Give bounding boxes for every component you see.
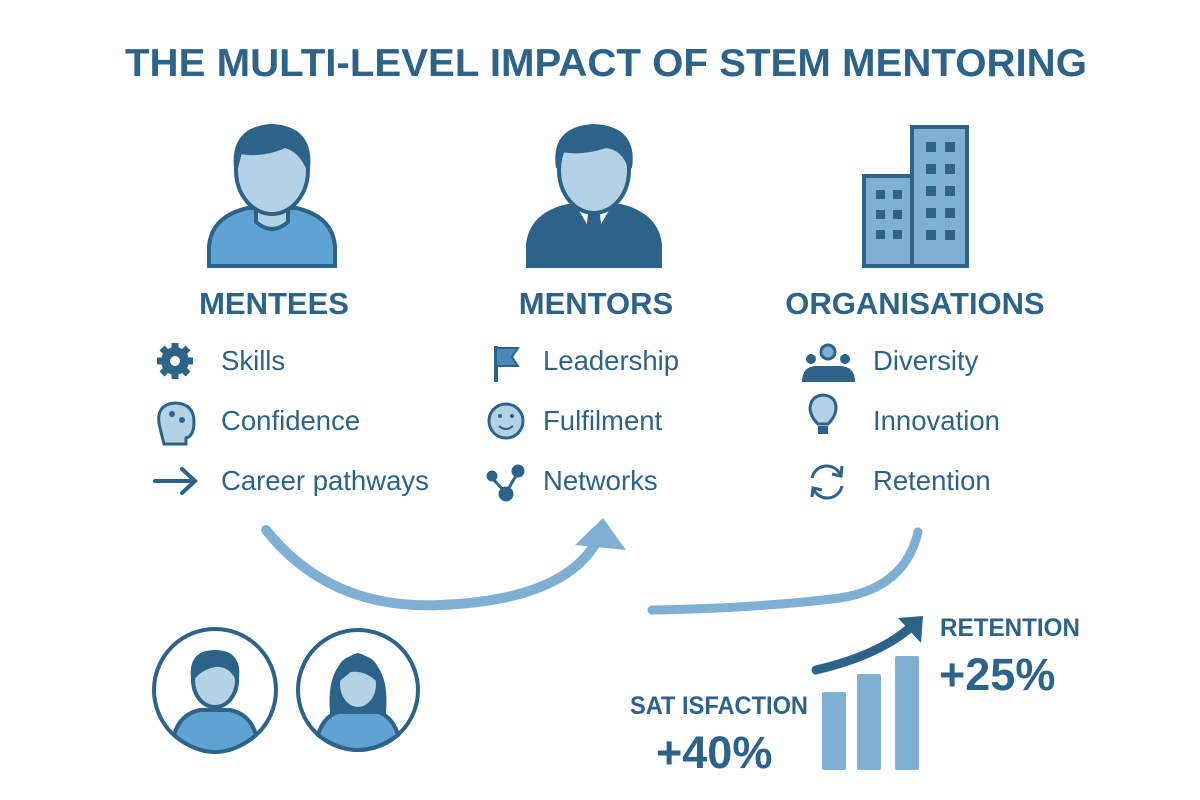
arrow: curved mentees to mentors bbox=[266, 518, 626, 605]
icon: arrow right bbox=[155, 469, 195, 493]
list: mentors bbox=[488, 345, 679, 500]
list: organisations: Retention bbox=[873, 465, 991, 496]
icon: bulb bbox=[810, 395, 836, 434]
icon: mentee person bbox=[209, 126, 335, 266]
icon: smiley bbox=[489, 404, 523, 438]
icon: network bbox=[488, 466, 523, 500]
heading: organisations: ORGANISATIONS bbox=[785, 286, 1045, 321]
avatar: male bbox=[154, 629, 276, 752]
icon: group bbox=[802, 345, 855, 382]
icon: building bbox=[864, 127, 967, 266]
list: mentees: Confidence bbox=[221, 405, 360, 436]
list: mentees bbox=[155, 343, 429, 496]
bar chart bbox=[822, 656, 919, 770]
stat: satisfaction: +40% bbox=[656, 727, 772, 778]
title: THE MULTI-LEVEL IMPACT OF STEM MENTORING bbox=[125, 42, 1087, 85]
list: mentors: Fulfilment bbox=[543, 405, 663, 436]
stat: satisfaction bbox=[630, 692, 808, 778]
list: organisations: Diversity bbox=[873, 345, 979, 376]
icon: flag bbox=[496, 346, 518, 382]
arrow: curved to organisations bbox=[652, 532, 918, 610]
icon: refresh bbox=[812, 466, 842, 498]
list: mentees: Career pathways bbox=[221, 465, 429, 496]
stat: satisfaction: SAT ISFACTION bbox=[630, 692, 808, 720]
list: mentees: Skills bbox=[221, 345, 285, 376]
stat: retention: +25% bbox=[939, 649, 1055, 700]
stat: retention: RETENTION bbox=[940, 614, 1080, 642]
icon: head bbox=[159, 403, 194, 444]
stat: retention bbox=[939, 614, 1080, 700]
heading: mentors: MENTORS bbox=[519, 286, 673, 321]
list: mentors: Networks bbox=[543, 465, 658, 496]
list: organisations bbox=[802, 345, 1000, 498]
list: mentors: Leadership bbox=[543, 345, 679, 376]
arrow: growth bbox=[816, 616, 923, 670]
avatar: female bbox=[298, 630, 418, 750]
list: organisations: Innovation bbox=[873, 405, 1000, 436]
icon: mentor person bbox=[528, 126, 660, 266]
icon: gear bbox=[157, 343, 193, 379]
heading: mentees: MENTEES bbox=[199, 286, 349, 321]
